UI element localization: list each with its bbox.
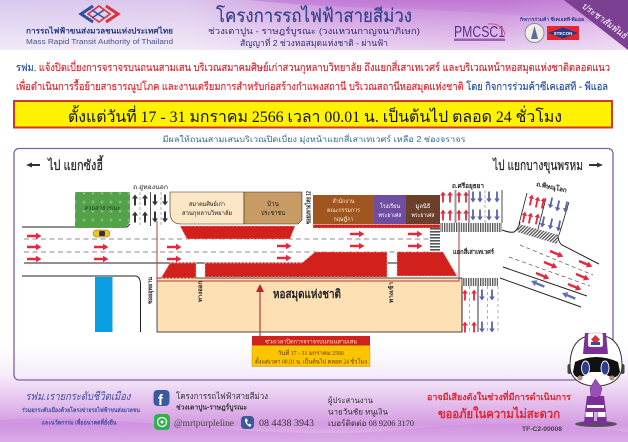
facebook page: ช่วงเตาปูน-ราษฎร์บูรณะ xyxy=(176,402,247,412)
head xyxy=(570,335,622,386)
callout: closure time: ช่วงเวลาปิดการจราจรบนถนนสามเสน xyxy=(265,338,357,346)
blue block xyxy=(95,277,112,332)
MRTA Thai name: การรถไฟฟ้าขนส่งมวลชนแห่งประเทศไทย xyxy=(26,26,173,36)
lane labels: ทางออก xyxy=(197,281,204,302)
closed work zones xyxy=(161,224,457,278)
lane labels: ซอยอุทยาน xyxy=(147,276,154,304)
date banner xyxy=(14,101,612,128)
zebra crossings xyxy=(430,223,559,286)
callout: closure time: ตั้งแต่เวลา 00.01 น. เป็นต้นไป ตลอด 24 ชั่วโมง xyxy=(255,356,367,366)
park xyxy=(75,192,130,228)
icon: phone xyxy=(241,416,254,429)
building: council of state xyxy=(313,195,374,224)
ribbon: public relations xyxy=(564,0,628,50)
road: south of junction xyxy=(462,286,498,332)
phone number: 08 4438 3943 xyxy=(259,418,315,428)
icon: red company badge: STECON xyxy=(554,31,572,36)
road: Si Ayutthaya xyxy=(440,190,502,223)
library name: หอสมุดแห่งชาติ xyxy=(273,287,341,302)
callout: closure time xyxy=(252,336,370,366)
park: สวนสาธารณะ xyxy=(84,205,120,212)
visor xyxy=(573,357,620,377)
shadow xyxy=(575,421,617,427)
footer slogan: รฟม.เรายกระดับชีวิตเมือง xyxy=(26,390,132,403)
label: U Thong Nok road: ถ.อู่ทองนอก xyxy=(133,184,168,191)
date banner: ตั้งแต่วันที่ 17 - 31 มกราคม 2566 เวลา 00.01 น. เป็นต้นไป ตลอด 24 ชั่วโมง xyxy=(68,105,562,126)
document code: TF-C2-00008 xyxy=(522,426,562,433)
notice text xyxy=(16,60,610,93)
diagonal road arrows xyxy=(530,248,594,302)
traffic effect note: มีผลให้ถนนสามเสนบริเวณปิดเบี่ยง มุ่งหน้าแยกสี่เสาเทเวศร์ เหลือ 2 ช่องจราจร xyxy=(162,133,466,144)
mascot xyxy=(568,333,624,427)
label: Phitsanulok road: ถ.พิษณุโลก xyxy=(536,179,568,194)
building: council of state: สำนักงาน xyxy=(332,197,355,205)
icon: yellow car xyxy=(93,230,110,237)
building: school: พระยาเศส xyxy=(378,212,402,219)
building: foundation xyxy=(406,195,440,224)
project title xyxy=(208,5,420,49)
building: foundation: มูลนิธิ xyxy=(416,203,431,210)
icon: line xyxy=(154,414,170,430)
label: Si Sao Thewet junction: แยกสี่เสาเทเวศร์ xyxy=(453,246,494,256)
library block xyxy=(157,278,462,332)
building: alumni association: สวนกุหลาบวิทยาลัย xyxy=(182,210,232,217)
building: houses: บ้าน xyxy=(267,200,280,208)
direction right: ไป แยกบางขุนพรหม xyxy=(492,157,583,174)
icon: facebook: f xyxy=(158,392,164,409)
logo: joint venture: กิจการร่วมค้า ซีเคเอสที-พีแอล xyxy=(520,16,584,23)
coordinator: ผู้ประสานงาน xyxy=(328,396,374,406)
building: school xyxy=(374,195,406,224)
footer slogan xyxy=(22,390,141,426)
project subtitle line 2: สัญญาที่ 2 ช่วงหอสมุดแห่งชาติ - ผ่านฟ้า xyxy=(240,37,388,49)
building: school: โรงเรียน xyxy=(380,202,400,210)
coordinator: เบอร์ติดต่อ 08 9206 3170 xyxy=(328,418,414,428)
direction left: ไป แยกซังฮี้ xyxy=(47,155,104,173)
eyes xyxy=(582,361,590,375)
building: foundation: พระยาเศส xyxy=(412,212,435,219)
building: council of state: คณะกรรมการ xyxy=(327,207,360,214)
hands xyxy=(590,379,602,398)
logo: joint venture xyxy=(520,16,584,42)
coordinator: นายวันชัย หนูเงิน xyxy=(328,408,389,418)
label: soi Mahadthai 12 xyxy=(304,191,312,225)
pointer arrow xyxy=(256,284,264,336)
lane labels xyxy=(147,276,395,304)
facebook page xyxy=(176,391,268,412)
apology text xyxy=(427,390,571,421)
building: houses xyxy=(244,192,302,224)
icon: MRTA diamond xyxy=(81,6,118,22)
line account: @mrtpurpleline xyxy=(174,418,234,428)
callout: closure time: วันที่ 17 - 31 มกราคม 2566 xyxy=(278,349,344,357)
helmet badge xyxy=(583,333,608,354)
footer slogan: ร่วมยกระดับเมืองด้วยโครงข่ายรถไฟฟ้าขนส่งมวลชน xyxy=(22,406,141,414)
logo: PMCSC1: PMCSC1 xyxy=(454,24,505,41)
road: Phitsanulok xyxy=(519,193,570,235)
panel: traffic map xyxy=(14,148,613,380)
coordinator xyxy=(328,396,414,428)
MRTA English name: Mass Rapid Transit Authority of Thailand xyxy=(26,39,173,46)
icon: facebook xyxy=(154,390,170,409)
icon: round seal xyxy=(525,24,544,42)
footer slogan: และนวัตกรรม เพื่ออนาคตที่ยั่งยืน xyxy=(42,418,117,426)
building: alumni association: สมาคมศิษย์เก่า xyxy=(189,200,225,208)
notice text line 2: เพื่อดำเนินการรื้อย้ายสาธารณูปโภค และงานเตรียมการสำหรับก่อสร้างกำแพงสถานี บริเวณสถานีหอสมุดแห่งชาติ โดย กิจการร่วมค้าซีเคเอสที - พีแอล xyxy=(16,79,608,93)
cheeks xyxy=(578,376,582,380)
direction left xyxy=(26,155,104,173)
header band xyxy=(0,0,628,50)
road: U Thong Nok xyxy=(132,192,168,226)
road arrows eastbound xyxy=(27,231,422,262)
road edges xyxy=(22,222,599,332)
building: alumni association xyxy=(170,192,244,224)
project title: โครงการรถไฟฟ้าสายสีม่วง xyxy=(216,5,412,26)
building: council of state: กฤษฎีกา xyxy=(334,216,354,223)
project subtitle line 1: ช่วงเตาปูน - ราษฎร์บูรณะ (วงแหวนกาญจนาภิเษก) xyxy=(208,26,420,37)
footer band xyxy=(0,345,628,442)
closure outline xyxy=(157,221,459,281)
apology text: อาจมีเสียงดังในช่วงที่มีการดำเนินการ xyxy=(427,390,571,402)
lane labels: ทางเข้า xyxy=(387,282,395,303)
label: Si Ayutthaya road: ถ.ศรีอยุธยา xyxy=(452,182,484,190)
label: soi Mahadthai 12: ซอยมหาดไทย 12 xyxy=(304,191,312,224)
legs xyxy=(584,396,607,424)
ear pads xyxy=(568,364,572,374)
apology text: ขออภัยในความไม่สะดวก xyxy=(438,406,560,421)
building: houses: ประชาชน xyxy=(261,210,285,217)
facebook page: โครงการรถไฟฟ้าสายสีม่วง xyxy=(176,391,268,401)
logo: MRTA xyxy=(26,6,173,46)
